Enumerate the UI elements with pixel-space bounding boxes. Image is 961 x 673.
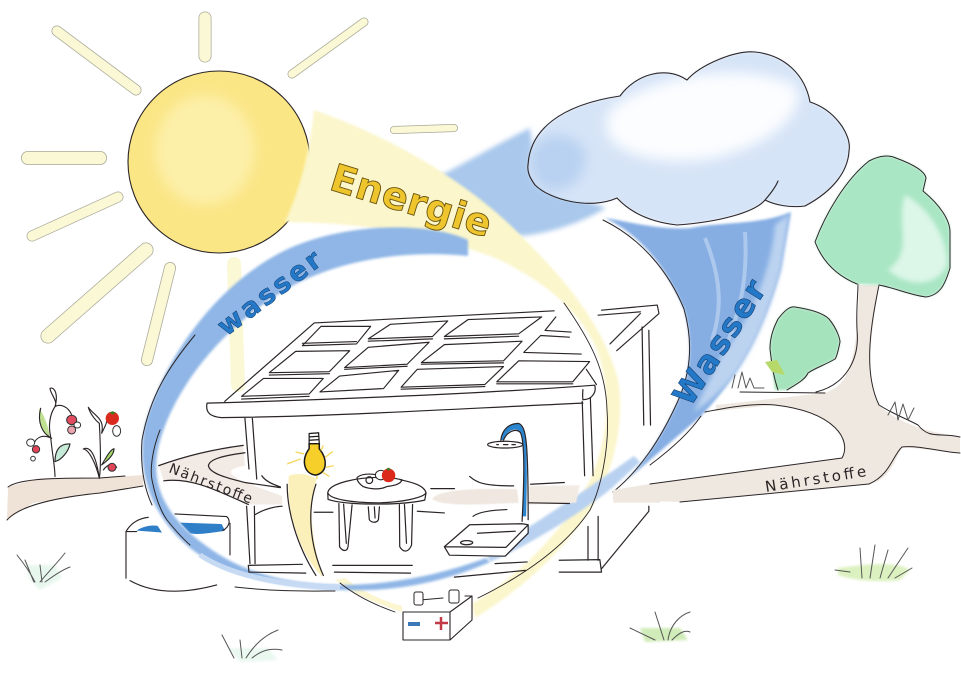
- posts and floor: [245, 327, 651, 577]
- bulb light stream: [288, 474, 323, 577]
- water tank: [126, 514, 230, 591]
- label: Energie: Energie: [325, 156, 497, 246]
- water loop outlines: [142, 335, 335, 591]
- energy band: [285, 110, 620, 618]
- white halo of water loop over tank: [152, 490, 245, 586]
- cloud-to-house water stream: [440, 128, 606, 236]
- solar panels: [225, 305, 659, 401]
- sun rays: [28, 18, 454, 385]
- nutrient band inside house: [159, 445, 660, 516]
- label: Nährstoffe left: Nährstoffe: [167, 461, 254, 507]
- water loop: [142, 227, 490, 590]
- house interior, solar roof and furniture: [159, 305, 660, 577]
- energy band to battery: [335, 578, 402, 612]
- light bulb: [287, 433, 334, 479]
- cloud: [528, 52, 849, 225]
- large tree: [815, 156, 950, 297]
- small tree: [765, 307, 840, 390]
- shower: [444, 423, 528, 557]
- nutrient flow right: [613, 284, 960, 502]
- label: Nährstoffe right: Nährstoffe: [764, 462, 867, 496]
- water funnel: [605, 212, 791, 492]
- plants: [27, 388, 121, 478]
- roof edge: [207, 385, 595, 418]
- funnel outline: [603, 220, 701, 492]
- water loop tail: [486, 456, 640, 562]
- nutrient flow left: [7, 475, 143, 520]
- battery: [403, 590, 472, 640]
- table: [328, 468, 426, 551]
- label: wasser left: wasser: [212, 244, 328, 343]
- sun: [128, 71, 310, 253]
- grass tufts: [17, 372, 914, 662]
- energy ring outline: [478, 303, 608, 598]
- label: Wasser right: Wasser: [665, 272, 774, 412]
